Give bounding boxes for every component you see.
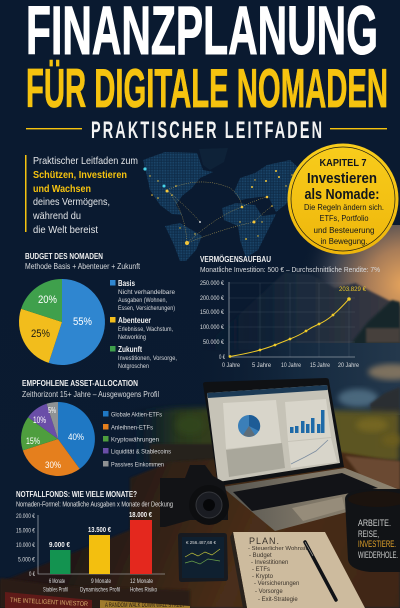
legend: budget: Investitionen, Vorsorge, — [118, 356, 177, 362]
legend: asset allocation: Liquidität & Stablecoins — [111, 448, 172, 456]
background photo: landscape and table — [0, 225, 400, 608]
bar chart: emergency fund: 5.000 € — [18, 558, 36, 564]
pie chart: asset allocation: 5% — [48, 406, 56, 415]
intro text block: deines Vermögens, — [33, 196, 110, 208]
legend: budget: Networking — [118, 335, 146, 341]
mug with slogan: ARBEITE. — [358, 518, 391, 528]
bar chart: emergency fund: 15.000 € — [16, 528, 36, 534]
badge: Kapitel 7: und Besteuerung — [314, 225, 375, 235]
phone with chart: € 256.487,68 € — [186, 540, 217, 545]
legend: budget: Erlebnisse, Wachstum, — [118, 327, 173, 333]
panel: wealth chart heading: VERMÖGENSAUFBAU — [200, 255, 271, 264]
camera — [160, 465, 229, 527]
bar chart: emergency fund: 9.000 € — [49, 540, 71, 549]
line chart: wealth growth: 0 Jahre — [222, 363, 241, 369]
line chart: wealth growth: 100.000 € — [200, 325, 225, 331]
mug with slogan — [345, 489, 400, 572]
legend: budget: Zukunft — [118, 345, 142, 354]
books at the bottom — [5, 592, 190, 608]
line chart: wealth growth: 200.000 € — [200, 296, 225, 302]
laptop — [203, 378, 400, 531]
line chart: wealth growth — [200, 281, 366, 369]
legend: asset allocation — [103, 411, 172, 468]
badge: Kapitel 7: in Bewegung. — [320, 236, 368, 246]
bar chart: emergency fund: 20.000 € — [16, 514, 36, 520]
legend: budget: Abenteuer — [118, 316, 151, 325]
bar chart: emergency fund: Hohes Risiko — [130, 588, 157, 594]
panel: asset allocation heading: EMPFOHLENE ASSET-ALLOCATION — [22, 379, 138, 388]
pie chart: budget: 55% — [73, 316, 92, 328]
panel: budget heading — [25, 252, 141, 271]
bar chart: emergency fund: Dynamisches Profil — [80, 588, 120, 594]
legend: asset allocation: Kryptowährungen — [111, 436, 159, 444]
notebook: plan: PLAN. — [249, 536, 280, 546]
badge: Kapitel 7: ETFs, Portfolio — [320, 213, 369, 223]
intro text block: und Wachsen — [33, 183, 91, 195]
legend: budget: Ausgaben (Wohnen, — [118, 298, 167, 304]
world map with flight routes — [143, 148, 303, 261]
line chart: wealth growth: 150.000 € — [200, 310, 225, 316]
notebook: plan: - ETFs — [252, 567, 270, 573]
notebook: plan — [230, 532, 365, 608]
intro text block: Schützen, Investieren — [33, 169, 127, 181]
panel: budget heading: Methode Basis + Abenteuer + Zukunft — [25, 262, 141, 271]
legend: budget: Basis — [118, 279, 135, 288]
panel: asset allocation heading — [22, 379, 159, 399]
badge: Kapitel 7 — [288, 144, 398, 254]
badge: Kapitel 7: Investieren — [307, 170, 377, 187]
bar chart: emergency fund: 6 Monate — [49, 579, 65, 585]
intro text block: während du — [32, 210, 81, 222]
legend: asset allocation: Anleihnen-ETFs — [111, 424, 154, 432]
badge: Kapitel 7: Die Regeln ändern sich. — [304, 202, 384, 212]
bar chart: emergency fund: 18.000 € — [129, 510, 153, 519]
notebook: plan: - Budget — [249, 553, 272, 559]
line chart: wealth growth: 15 Jahre — [310, 363, 331, 369]
panel: asset allocation heading: Zeithorizont 15+ Jahre – Ausgewogens Profil — [22, 390, 159, 399]
line chart: wealth growth: 50.000 € — [203, 340, 225, 346]
panel: emergency fund heading: NOTFALLFONDS: WIE VIELE MONATE? — [16, 490, 137, 499]
line chart: wealth growth: 20 Jahre — [338, 363, 360, 369]
intro text block: die Welt bereist — [33, 224, 98, 236]
pie chart: asset allocation: 15% — [26, 436, 40, 446]
legend: asset allocation: Passives Einkommen — [111, 462, 164, 468]
panel: emergency fund heading: Nomaden-Formel: Monatliche Ausgaben x Monate der Deckung — [16, 502, 173, 508]
panel: budget heading: BUDGET DES NOMADEN — [25, 252, 103, 261]
legend: budget: Notgroschen — [118, 364, 149, 370]
panel: emergency fund heading — [16, 490, 173, 508]
legend: budget: Nicht verhandelbare — [118, 290, 176, 296]
bar chart: emergency fund: 0 € — [29, 572, 35, 578]
panel: wealth chart heading: Monatliche Investition: 500 € – Durchschnittliche Rendite: 7% — [200, 265, 380, 274]
bar chart: emergency fund: 13.500 € — [88, 525, 112, 534]
line chart: wealth growth: 203.829 € — [339, 286, 366, 293]
line chart: wealth growth: 0 € — [219, 355, 225, 361]
legend: budget: Essen, Versicherungen) — [118, 306, 175, 312]
notebook: plan: - Krypto — [252, 574, 274, 580]
bar chart: emergency fund: 9 Monate — [91, 579, 112, 585]
notebook: plan: - Steuerlicher Wohnsitz — [248, 546, 310, 552]
intro text block — [25, 155, 138, 236]
badge: Kapitel 7: als Nomade: — [304, 186, 380, 203]
pie chart: asset allocation: 10% — [33, 415, 46, 425]
bar chart: emergency fund — [16, 510, 165, 594]
bar chart: emergency fund: 12 Monate — [130, 579, 154, 585]
pie chart: asset allocation: 30% — [45, 460, 61, 470]
pie chart: budget: 25% — [31, 328, 50, 340]
legend: budget — [110, 279, 177, 370]
bar chart: emergency fund: Stabiles Profil — [43, 588, 68, 594]
legend: asset allocation: Globale Aktien-ETFs — [111, 412, 163, 418]
notebook: plan: - Versicherungen — [254, 581, 299, 587]
pie chart: budget: 20% — [38, 294, 57, 306]
panel: wealth chart heading — [200, 255, 380, 274]
pen — [305, 542, 336, 600]
line chart: wealth growth: 10 Jahre — [281, 363, 302, 369]
line chart: wealth growth: 5 Jahre — [252, 363, 272, 369]
pie chart: asset allocation — [21, 402, 95, 476]
phone with chart — [178, 533, 228, 582]
notebook: plan: - Exit-Strategie — [258, 597, 298, 603]
badge: Kapitel 7: KAPITEL 7 — [320, 158, 367, 169]
line chart: wealth growth: 250.000 € — [200, 281, 225, 287]
subtitle with rules: PRAKTISCHER LEITFADEN — [91, 117, 322, 144]
mug with slogan: REISE, — [358, 529, 379, 539]
pie chart: asset allocation: 40% — [68, 432, 84, 442]
bar chart: emergency fund: 10.000 € — [16, 543, 36, 549]
notebook: plan: - Vorsorge — [255, 589, 283, 595]
intro text block: Praktischer Leitfaden zum — [33, 155, 138, 167]
notebook: plan: - Investitionen — [251, 560, 288, 566]
pie chart: budget — [19, 279, 105, 365]
